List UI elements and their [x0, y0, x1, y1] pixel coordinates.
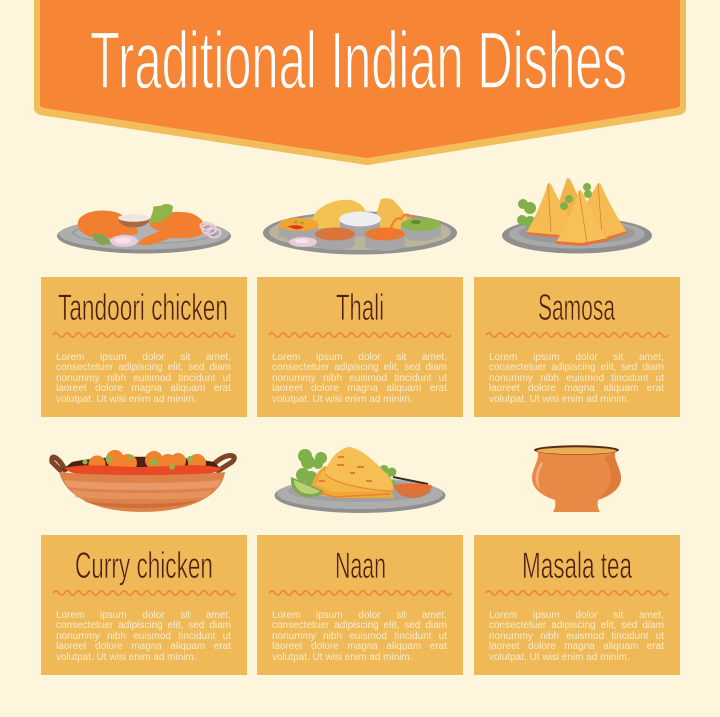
panel: curry chicken: [41, 535, 247, 675]
text block: thali: nonummy nibh euismod tincidunt ut: [272, 373, 447, 384]
text block: curry chicken: Lorem ipsum dolor sit amet,: [56, 610, 231, 620]
heading: samosa: Samosa: [538, 287, 615, 328]
wavy divider: [269, 333, 451, 337]
panel: naan: [257, 535, 463, 675]
wavy divider: [53, 333, 235, 337]
text block: naan: consectetuer adipiscing elit, sed diam: [272, 620, 447, 631]
text block: naan: volutpat. Ut wisi enim ad minim.: [272, 652, 413, 663]
wavy divider: [486, 591, 668, 595]
text block: naan: laoreet dolore magna aliquam erat: [272, 641, 447, 652]
text block: samosa: consectetuer adipiscing elit, sed diam: [489, 362, 664, 373]
wavy divider: [269, 591, 451, 595]
text block: tandoori chicken: volutpat. Ut wisi enim ad minim.: [56, 394, 197, 405]
illustration: tandoori chicken: [57, 204, 231, 254]
heading: naan: Naan: [335, 545, 386, 586]
illustration: samosa: [502, 178, 652, 254]
text block: samosa: Lorem ipsum dolor sit amet,: [489, 352, 664, 362]
text block: masala tea: Lorem ipsum dolor sit amet,: [489, 610, 664, 620]
text block: tandoori chicken: consectetuer adipiscing elit, sed diam: [56, 362, 231, 373]
text block: curry chicken: [56, 610, 231, 663]
text block: thali: laoreet dolore magna aliquam erat: [272, 383, 447, 394]
text block: masala tea: consectetuer adipiscing elit, sed diam: [489, 620, 664, 631]
text block: curry chicken: nonummy nibh euismod tincidunt ut: [56, 631, 231, 642]
illustration: masala tea: [532, 445, 621, 512]
text block: tandoori chicken: nonummy nibh euismod tincidunt ut: [56, 373, 231, 384]
text block: samosa: volutpat. Ut wisi enim ad minim.: [489, 394, 630, 405]
text block: thali: volutpat. Ut wisi enim ad minim.: [272, 394, 413, 405]
text block: tandoori chicken: laoreet dolore magna aliquam erat: [56, 383, 231, 394]
text block: masala tea: nonummy nibh euismod tincidunt ut: [489, 631, 664, 642]
illustration: naan: [274, 447, 446, 513]
panel: tandoori chicken: [41, 277, 247, 417]
heading: thali: Thali: [336, 287, 384, 328]
text block: naan: Lorem ipsum dolor sit amet,: [272, 610, 447, 620]
illustration: thali: [263, 198, 457, 254]
text block: samosa: nonummy nibh euismod tincidunt ut: [489, 373, 664, 384]
text block: thali: Lorem ipsum dolor sit amet,: [272, 352, 447, 362]
illustration: curry chicken: [52, 450, 234, 512]
text block: tandoori chicken: Lorem ipsum dolor sit amet,: [56, 352, 231, 362]
wavy divider: [486, 333, 668, 337]
text block: samosa: [489, 352, 664, 405]
text block: naan: nonummy nibh euismod tincidunt ut: [272, 631, 447, 642]
text block: curry chicken: laoreet dolore magna aliquam erat: [56, 641, 231, 652]
panel: masala tea: [474, 535, 680, 675]
wavy divider: [53, 591, 235, 595]
panel: samosa: [474, 277, 680, 417]
text block: masala tea: volutpat. Ut wisi enim ad minim.: [489, 652, 630, 663]
panel: thali: [257, 277, 463, 417]
text block: thali: [272, 352, 447, 405]
text block: samosa: laoreet dolore magna aliquam erat: [489, 383, 664, 394]
text block: curry chicken: volutpat. Ut wisi enim ad minim.: [56, 652, 197, 663]
text block: naan: [272, 610, 447, 663]
text block: curry chicken: consectetuer adipiscing elit, sed diam: [56, 620, 231, 631]
text block: masala tea: [489, 610, 664, 663]
text block: tandoori chicken: [56, 352, 231, 405]
text block: thali: consectetuer adipiscing elit, sed diam: [272, 362, 447, 373]
title banner: [34, 0, 686, 165]
text block: masala tea: laoreet dolore magna aliquam erat: [489, 641, 664, 652]
